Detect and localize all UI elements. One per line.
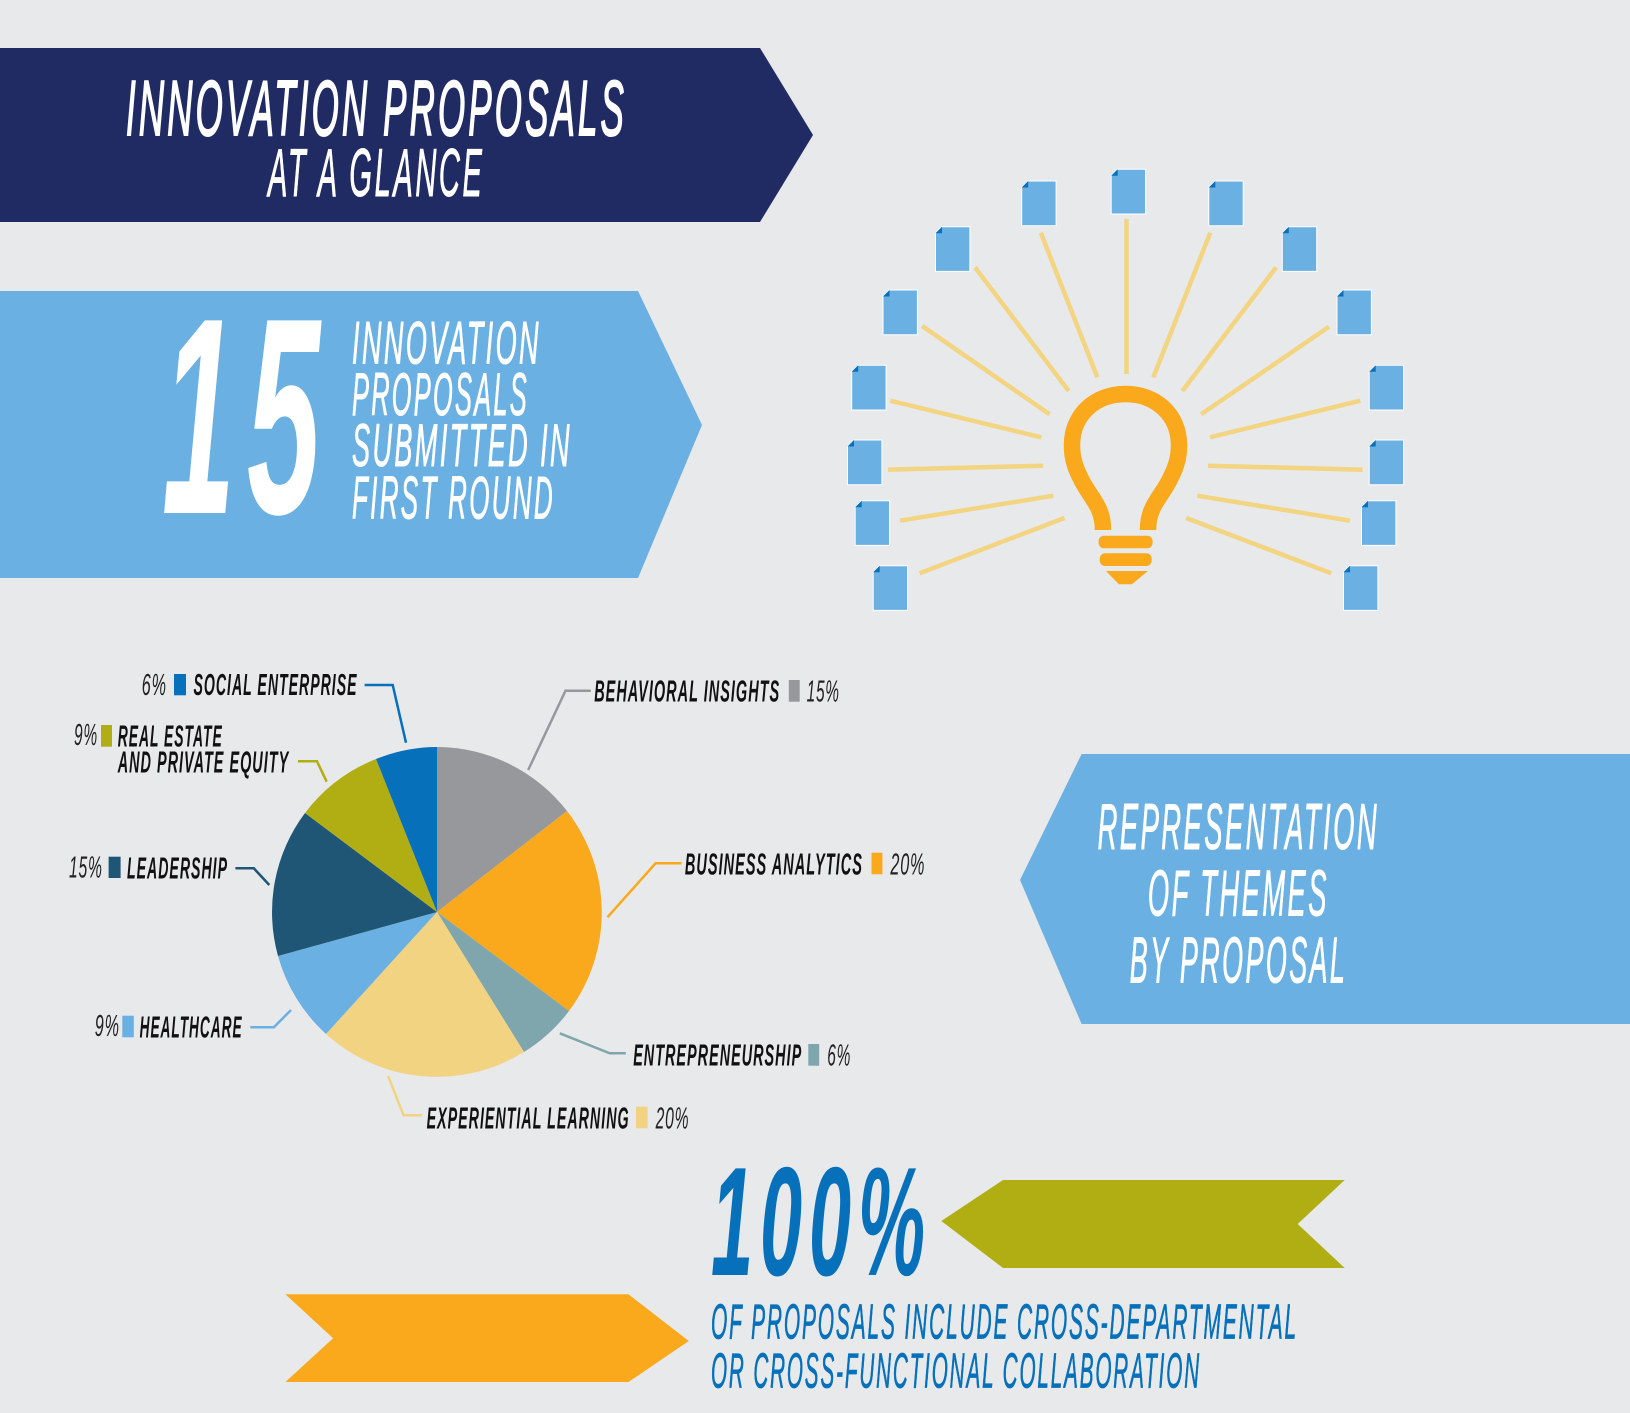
- label: real estate and private equity: 9%: [74, 718, 98, 752]
- slice: experiential learning 20%: [326, 912, 524, 1077]
- title banner: [0, 48, 813, 222]
- label: entrepreneurship: [560, 1033, 851, 1073]
- document 9: [1209, 181, 1243, 226]
- text block: cross-departmental collaboration: [711, 1294, 1298, 1398]
- document 12: [1369, 365, 1404, 410]
- label: real estate and private equity: [74, 718, 327, 782]
- label: healthcare: 9%: [95, 1009, 120, 1043]
- slice: social enterprise 6%: [376, 747, 437, 912]
- label: behavioral insights: [528, 675, 840, 770]
- label: leadership: 15%: [69, 850, 103, 884]
- document 3: [936, 227, 970, 271]
- document 15: [1344, 566, 1378, 610]
- document 8: [873, 566, 908, 610]
- banner shape: light blue arrow: [0, 291, 702, 578]
- label: entrepreneurship: ENTREPRENEURSHIP: [633, 1039, 802, 1073]
- text block: proposals submitted: PROPOSALS: [352, 361, 529, 428]
- slice: healthcare 9%: [278, 912, 437, 1034]
- document 10: [1282, 227, 1317, 271]
- slice: behavioral insights 15%: [437, 747, 567, 912]
- label: business analytics: [607, 847, 925, 917]
- heading: representation of themes by proposal: OF THEMES: [1148, 858, 1329, 930]
- document 4: [883, 290, 917, 335]
- label: experiential learning: 20%: [655, 1101, 689, 1135]
- label: real estate and private equity: AND PRIVATE EQUITY: [117, 746, 289, 780]
- slice: business analytics 20%: [437, 811, 602, 1011]
- panel: representation of themes by proposal: [1020, 754, 1630, 1024]
- label: social enterprise: SOCIAL ENTERPRISE: [194, 668, 358, 702]
- panel: 15 proposals submitted: 15: [162, 261, 332, 573]
- label: social enterprise: [142, 668, 406, 743]
- arrow: orange ribbon pointing right: [285, 1294, 689, 1382]
- label: leadership: LEADERSHIP: [127, 851, 228, 885]
- text block: proposals submitted: INNOVATION: [352, 310, 541, 377]
- document 6: [848, 440, 882, 485]
- banner shape: navy arrow: [0, 48, 813, 222]
- document 5: [852, 365, 886, 410]
- document 7: [855, 501, 890, 545]
- document 1: [1111, 169, 1146, 214]
- panel: 15 proposals submitted: [0, 261, 702, 578]
- pie chart: themes by proposal: [272, 747, 602, 1077]
- slice: real estate and private equity 9%: [305, 759, 437, 912]
- icon: light bulb: [1072, 394, 1179, 584]
- arrow: olive ribbon pointing left: [941, 1180, 1345, 1268]
- document 11: [1337, 290, 1371, 335]
- document 14: [1362, 501, 1396, 545]
- document 13: [1369, 440, 1404, 485]
- slice: entrepreneurship 6%: [437, 912, 569, 1052]
- slice: leadership 15%: [272, 813, 437, 956]
- label: entrepreneurship: 6%: [827, 1039, 851, 1073]
- label: business analytics: BUSINESS ANALYTICS: [685, 847, 863, 881]
- heading: representation of themes by proposal: [1098, 791, 1379, 996]
- rays from light bulb to documents: [888, 219, 1363, 573]
- label: business analytics: 20%: [890, 847, 925, 881]
- label: healthcare: [95, 1009, 291, 1045]
- text block: proposals submitted: [352, 310, 572, 532]
- title banner: AT A GLANCE: [266, 135, 484, 211]
- label: social enterprise: 6%: [142, 668, 167, 702]
- label: experiential learning: EXPERIENTIAL LEARNING: [427, 1101, 630, 1135]
- label: experiential learning: [388, 1076, 689, 1135]
- label: leadership: [69, 850, 269, 885]
- label: behavioral insights: BEHAVIORAL INSIGHTS: [594, 675, 780, 709]
- panel: 15 proposals submitted: SUBMITTED IN: [352, 412, 572, 479]
- icon: documents around the bulb: [848, 169, 1404, 610]
- banner shape: light blue arrow pointing left: [1020, 754, 1630, 1024]
- panel: 15 proposals submitted: FIRST ROUND: [352, 464, 555, 532]
- label: healthcare: HEALTHCARE: [140, 1011, 243, 1045]
- document 2: [1022, 181, 1056, 226]
- label: behavioral insights: 15%: [807, 675, 840, 709]
- infographic canvas: 100%: [711, 1135, 932, 1308]
- title banner: INNOVATION PROPOSALS: [126, 64, 627, 152]
- label: real estate and private equity: REAL ESTATE: [118, 720, 223, 754]
